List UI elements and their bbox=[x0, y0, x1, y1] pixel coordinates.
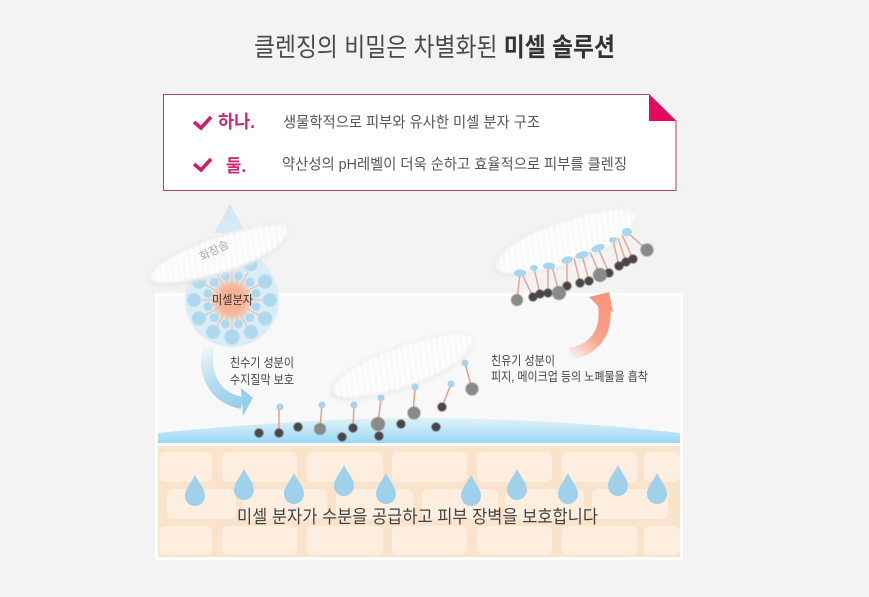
cotton pad with captured dirt bbox=[494, 209, 654, 306]
sebum film: blue water layer bbox=[158, 418, 680, 443]
dark particles bbox=[528, 254, 638, 302]
sticks bbox=[517, 232, 647, 300]
panel: skin diagram background bbox=[156, 294, 682, 558]
second line: 피지, 메이크업 등의 노폐물을 흡착 bbox=[491, 370, 648, 384]
skin barrier bbox=[158, 446, 680, 557]
gray particles bbox=[511, 244, 654, 306]
second line: 수지질막 보호 bbox=[230, 373, 294, 387]
panel: key points note bbox=[164, 94, 676, 190]
arrow: blue curved down bbox=[207, 348, 253, 416]
text: point one: 생물학적으로 피부와 유사한 미셀 분자 구조 bbox=[283, 114, 540, 131]
title: 클렌징의 비밀은 차별화된 미셀 솔루션 bbox=[254, 34, 615, 62]
point one bbox=[194, 112, 540, 132]
arrow shaft bbox=[207, 348, 242, 403]
pad surface bbox=[333, 333, 472, 398]
arrow shaft bbox=[570, 305, 605, 354]
icon: check mark two bbox=[194, 159, 211, 170]
icon: check mark one bbox=[194, 117, 211, 128]
skin caption: 미셀 분자가 수분을 공급하고 피부 장벽을 보호합니다 bbox=[237, 507, 598, 527]
first line: 친유기 성분이 bbox=[491, 354, 555, 368]
text: point two: 약산성의 pH레벨이 더욱 순하고 효율적으로 피부를 클렌징 bbox=[282, 156, 627, 173]
pad shadow bbox=[494, 210, 634, 275]
blue heads bbox=[276, 360, 468, 410]
water drops bbox=[185, 465, 667, 506]
skin cells bbox=[159, 452, 680, 555]
droplet body bbox=[185, 235, 279, 347]
label: one: 하나. bbox=[218, 112, 255, 132]
point two bbox=[194, 156, 627, 176]
micelle droplet bbox=[185, 204, 279, 347]
text: lipophilic note bbox=[491, 354, 648, 384]
orange tails bbox=[200, 268, 264, 332]
gray makeup particles bbox=[314, 382, 478, 435]
dark sebum particles bbox=[254, 402, 446, 442]
label: two: 둘. bbox=[226, 156, 246, 176]
pad surface bbox=[496, 209, 635, 273]
blue heads bbox=[514, 228, 632, 276]
arrow head bbox=[241, 388, 253, 416]
first line: 친수기 성분이 bbox=[230, 356, 294, 370]
arrow: orange curved up bbox=[570, 292, 613, 354]
micelles on skin bbox=[254, 360, 478, 442]
text: hydrophilic note bbox=[230, 356, 294, 387]
arrow head bbox=[589, 292, 613, 312]
cotton pad: left bbox=[149, 225, 287, 286]
pad shadow bbox=[331, 333, 472, 400]
label: micelle molecule: 미셀분자 bbox=[212, 293, 253, 307]
pad shadow bbox=[149, 225, 287, 286]
label: cosmetic cotton: 화장솜 bbox=[197, 238, 231, 264]
skin base bbox=[158, 446, 680, 557]
note box with folded corner bbox=[164, 94, 676, 190]
arrow: rising cosmetic arrow bbox=[214, 204, 246, 262]
sticks bbox=[279, 363, 472, 433]
blue hydrophilic heads bbox=[187, 257, 277, 344]
pad surface bbox=[151, 225, 287, 283]
cotton pad: middle bbox=[331, 333, 472, 400]
icon: folded corner bbox=[649, 94, 676, 121]
starburst core bbox=[210, 278, 254, 322]
